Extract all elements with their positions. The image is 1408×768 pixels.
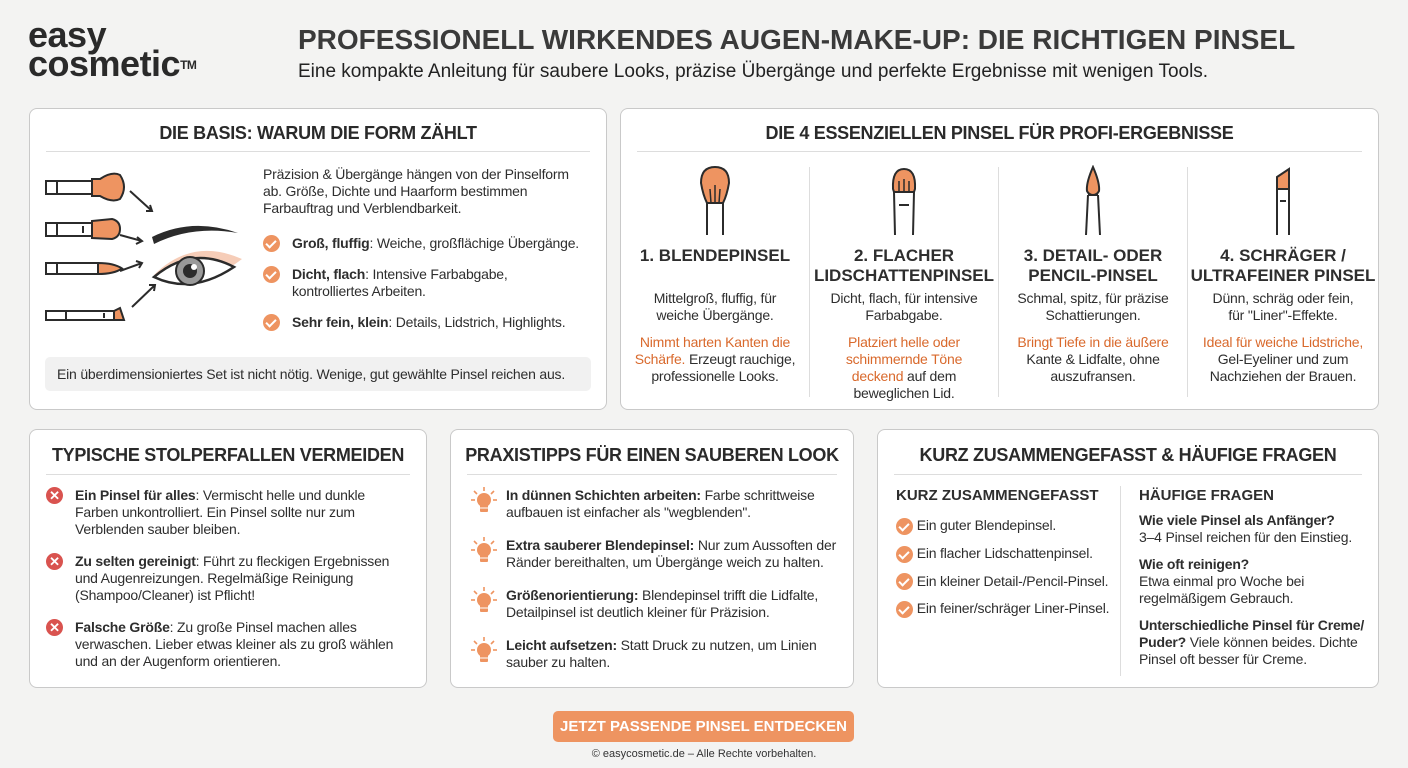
faq: Puder? Viele können beides. Dichte [1139,634,1358,650]
faq: Wie oft reinigen? [1139,556,1249,572]
item: sehr fein [263,314,565,331]
icon: flacher pinsel [892,168,916,235]
logo [28,14,196,84]
tip 1 [471,487,815,520]
panel: stolperfallen [29,429,427,688]
column: schraeger pinsel: für "Liner"-Effekte. [1228,307,1338,323]
note box [45,357,591,391]
heading: zusammenfassung: KURZ ZUSAMMENGEFASST & HÄUFIGE FRAGEN [920,445,1336,465]
column: schraeger pinsel: Ideal für weiche Lidstriche, [1203,334,1363,350]
icon: detail pinsel [1085,165,1101,235]
faq: HÄUFIGE FRAGEN [1139,487,1274,504]
summary list: KURZ ZUSAMMENGEFASST [896,487,1098,504]
column: schraeger pinsel: ULTRAFEINER PINSEL [1191,266,1375,285]
panel: die basis: Groß, fluffig: Weiche, großflächige Übergänge. [292,235,579,251]
column: flacher lidschattenpinsel: schimmernde Töne [846,351,962,367]
note box: Ein überdimensioniertes Set ist nicht nötig. Wenige, gut gewählte Pinsel reichen aus. [57,366,565,382]
item: dicht flach: Dicht, flach: Intensive Farbabgabe, [292,266,508,282]
panel: stolperfallen: Zu selten gereinigt: Führt zu fleckigen Ergebnissen und Augenreizungen. Regelmäßige Reinigung (Shampoo/Cleaner) ist Pflicht! [75,553,389,603]
item: ein pinsel fuer alles [46,487,365,537]
column: flacher lidschattenpinsel: Platziert helle oder [848,334,960,350]
column: blendepinsel [635,166,795,384]
faq: Wie viele Pinsel als Anfänger? [1139,512,1335,528]
panel: stolperfallen: Falsche Größe: Zu große Pinsel machen alles verwaschen. Lieber etwas kleiner als zu groß wählen und an der Augenform orientieren. [75,619,393,669]
tip 2 [471,537,836,570]
column: detail pinsel [1017,165,1169,384]
faq [1139,487,1364,667]
item: dicht flach: kontrolliertes Arbeiten. [292,283,426,299]
item: gross fluffig [263,235,579,252]
faq: Etwa einmal pro Woche bei [1139,573,1304,589]
column: blendepinsel: 1. BLENDEPINSEL [640,246,790,265]
column: blendepinsel: weiche Übergänge. [656,307,774,323]
panel: 4 pinsel [620,108,1379,410]
footer: © easycosmetic.de – Alle Rechte vorbehalten. [592,748,816,760]
column: flacher lidschattenpinsel: deckend auf dem [852,368,956,384]
column: detail pinsel: Kante & Lidfalte, ohne [1026,351,1160,367]
panel: zusammenfassung & fragen [877,429,1379,688]
column: flacher lidschattenpinsel [814,168,994,401]
column: detail pinsel: Bringt Tiefe in die äußere [1017,334,1169,350]
column: detail pinsel: 3. DETAIL- ODER [1024,246,1162,265]
column: blendepinsel: Nimmt harten Kanten die [640,334,790,350]
faq: Unterschiedliche Pinsel für Creme/ [1139,617,1364,633]
faq: Pinsel oft besser für Creme. [1139,651,1307,667]
button: cta: JETZT PASSENDE PINSEL ENTDECKEN [560,718,847,735]
panel: praxistipps: Extra sauberer Blendepinsel: Nur zum Aussoften der Ränder bereithalten, um Übergänge weich zu halten. [506,537,836,570]
intro text: Präzision & Übergänge hängen von der Pinselform ab. Größe, Dichte und Haarform bestimmen Farbauftrag und Verblendbarkeit. [263,166,569,216]
summary list: Ein guter Blendepinsel. [917,517,1056,533]
summary list: Ein feiner/schräger Liner-Pinsel. [917,600,1109,616]
column: detail pinsel: PENCIL-PINSEL [1028,266,1158,285]
faq: 3–4 Pinsel reichen für den Einstieg. [1139,529,1352,545]
panel: praxistipps: In dünnen Schichten arbeiten: Farbe schrittweise aufbauen ist einfacher als "wegblenden". [506,487,815,520]
heading: 4 pinsel: DIE 4 ESSENZIELLEN PINSEL FÜR PROFI-ERGEBNISSE [766,123,1233,143]
column: detail pinsel: auszufransen. [1050,368,1136,384]
item: falsche groesse [46,619,393,669]
button: cta [553,711,854,742]
logo: easy [28,14,106,55]
column: flacher lidschattenpinsel: beweglichen Lid. [853,385,955,401]
illustration: brushes and eye [45,172,242,321]
panel: stolperfallen: Ein Pinsel für alles: Vermischt helle und dunkle Farben unkontrolliert. Ein Pinsel sollte nur zum Verblenden sauber bleiben. [75,487,365,537]
icon: blendepinsel [700,166,730,235]
faq: regelmäßigem Gebrauch. [1139,590,1293,606]
heading: die basis: DIE BASIS: WARUM DIE FORM ZÄHLT [159,123,477,143]
panel: stolperfallen: ✕ [49,488,60,503]
tip 3 [471,587,818,620]
item: zu selten gereinigt [46,553,389,603]
panel: die basis [29,108,607,410]
column: schraeger pinsel [1191,167,1375,384]
column: flacher lidschattenpinsel: LIDSCHATTENPINSEL [814,266,994,285]
heading: stolperfallen: TYPISCHE STOLPERFALLEN VERMEIDEN [52,445,404,465]
column: schraeger pinsel: Gel-Eyeliner und zum [1218,351,1348,367]
heading: praxistipps: PRAXISTIPPS FÜR EINEN SAUBEREN LOOK [465,445,839,465]
item: dicht flach [263,266,508,299]
column: detail pinsel: Schattierungen. [1045,307,1141,323]
column: schraeger pinsel: Dünn, schräg oder fein, [1213,290,1353,306]
column: flacher lidschattenpinsel: Dicht, flach, für intensive [830,290,978,306]
column: detail pinsel: Schmal, spitz, für präzise [1017,290,1169,306]
title: PROFESSIONELL WIRKENDES AUGEN-MAKE-UP: DIE RICHTIGEN PINSEL [298,24,1295,55]
column: schraeger pinsel: Nachziehen der Brauen. [1210,368,1356,384]
logo: cosmeticTM [28,43,196,84]
column: blendepinsel: Schärfe. Erzeugt rauchige, [635,351,795,367]
column: blendepinsel: Mittelgroß, fluffig, für [654,290,776,306]
panel: stolperfallen: ✕ [49,554,60,569]
panel: die basis: Sehr fein, klein: Details, Lidstrich, Highlights. [292,314,565,330]
summary list: Ein kleiner Detail-/Pencil-Pinsel. [917,573,1108,589]
summary list [896,487,1109,618]
summary list: Ein flacher Lidschattenpinsel. [917,545,1093,561]
panel: praxistipps [450,429,854,688]
icon: schraeger pinsel [1276,167,1290,235]
column: blendepinsel: professionelle Looks. [651,368,779,384]
subtitle: Eine kompakte Anleitung für saubere Looks, präzise Übergänge und perfekte Ergebnisse mit wenigen Tools. [298,61,1208,82]
panel: stolperfallen: ✕ [49,620,60,635]
column: schraeger pinsel: 4. SCHRÄGER / [1220,246,1346,265]
column: flacher lidschattenpinsel: Farbabgabe. [865,307,943,323]
column: flacher lidschattenpinsel: 2. FLACHER [854,246,954,265]
panel: praxistipps: Leicht aufsetzen: Statt Druck zu nutzen, um Linien sauber zu halten. [506,637,817,670]
panel: praxistipps: Größenorientierung: Blendepinsel trifft die Lidfalte, Detailpinsel ist deutlich kleiner für Präzision. [506,587,818,620]
tip 4 [471,637,817,670]
